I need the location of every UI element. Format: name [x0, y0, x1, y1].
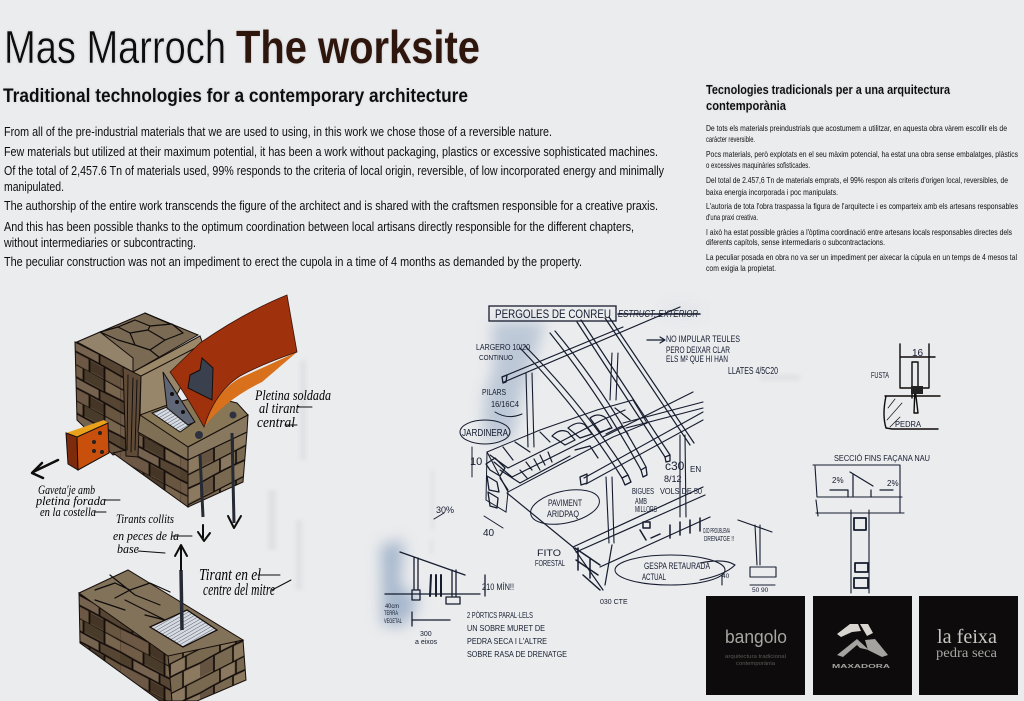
- english body text: manipulated.: [4, 179, 64, 194]
- english body text: [3, 124, 664, 269]
- catalan heading: contemporània: [706, 99, 787, 113]
- rod arrowheads: [198, 516, 241, 541]
- base right face: [168, 640, 246, 701]
- sketch: blue wash shading: [381, 307, 700, 626]
- catalan body text: [706, 123, 1018, 273]
- ellipse: gespa: [615, 555, 725, 585]
- dry stone wall: [486, 400, 647, 512]
- orange underside of plate: [204, 352, 297, 427]
- english body text: And this has been possible thanks to the optimum coordination between local artisans directly responsible for the different chapters,: [4, 219, 634, 234]
- steel base plate: [150, 610, 217, 647]
- sketch: small section: TERRA: [384, 611, 398, 617]
- note: no impuar teules: LLATES 4/5C20: [728, 366, 778, 377]
- labels on perspective: c30: [665, 459, 685, 473]
- ellipse: paviment: ARIDPAQ: [547, 509, 579, 519]
- inner light face: [140, 344, 203, 416]
- handwritten note: plate: central: [257, 415, 295, 431]
- catalan body text: o excessives maquinàries sofisticades.: [706, 160, 810, 170]
- sketch: small section: [384, 552, 567, 659]
- lower ground lines: [507, 487, 710, 590]
- sketch: small section: 300: [420, 631, 432, 638]
- handwritten note: centre rod: Tirant en el: [199, 565, 261, 584]
- dimension lines: [434, 412, 522, 528]
- arrow left: [32, 460, 58, 478]
- logo: la feixa: [919, 596, 1018, 695]
- labels on perspective: 8/12: [664, 474, 682, 484]
- subtitle: Traditional technologies for a contemporary architecture: [3, 86, 468, 107]
- sketch: small end detail: DRENATGE !!: [704, 536, 734, 543]
- sketch: small end detail: 50 90: [752, 587, 769, 594]
- vertical rod: [181, 570, 182, 630]
- english body text: From all of the pre-industrial materials that we are used to using, in this work we chose those of a reversible nature.: [4, 124, 552, 139]
- note: no impuar teules: NO IMPULAR TEULES: [666, 334, 740, 345]
- english body text: The authorship of the entire work transcends the figure of the architect and is shared with the craftsmen responsible for a creative praxis.: [4, 198, 658, 213]
- logo: mountain mark: MAXADORA: [832, 664, 890, 670]
- catalan body text: caràcter reversible.: [706, 134, 755, 144]
- right stone face: [188, 432, 247, 507]
- stone top: [77, 313, 198, 372]
- catalan heading: [706, 83, 951, 113]
- catalan body text: diferents capítols, sense intermediaris o subcontractacions.: [706, 237, 885, 247]
- red curved plate: [170, 295, 297, 427]
- logo: mountain mark: [813, 596, 912, 695]
- lower front stone face: [113, 432, 188, 507]
- catalan heading: Tecnologies tradicionals per a una arquitectura: [706, 83, 951, 97]
- note: no impuar teules: [666, 334, 778, 377]
- labels on perspective: AMB: [635, 497, 647, 506]
- sketch: small section: 40cm: [385, 604, 399, 610]
- ellipse: paviment: PAVIMENT: [548, 498, 582, 508]
- ledge sides: [138, 415, 188, 460]
- smudges of faint pencil: [268, 360, 800, 590]
- base plate: [152, 407, 193, 432]
- logo: bangolo: bangolo: [725, 627, 787, 647]
- sketch: small section: a eixos: [415, 639, 438, 646]
- logo: bangolo: arquitectura tradicional: [725, 654, 786, 660]
- handwritten note: plate: al tirant: [259, 401, 300, 417]
- labels on perspective: BIGUES: [632, 487, 654, 496]
- labels on perspective: [436, 342, 702, 606]
- handwritten note: anchor: [35, 482, 120, 519]
- sketch: pergola perspective: [434, 306, 778, 606]
- labels on perspective: MILLORS: [635, 505, 657, 514]
- labels on perspective: 030 CTE: [600, 599, 628, 606]
- handwritten note: centre rod: [199, 565, 291, 599]
- english body text: Of the total of 2,457.6 Tn of materials used, 99% responds to the criteria of local origin, reversible, of low incorporated energy and minimally: [4, 163, 664, 178]
- sketch: pillar foot detail: FUSTA: [871, 371, 889, 380]
- handwritten note: rods: base: [117, 541, 139, 556]
- note: porxos paral·lels: 2 PÒRTICS PARAL·LELS: [467, 610, 533, 620]
- title: The worksite: [236, 21, 480, 73]
- sketch: pillar foot detail: [871, 344, 940, 429]
- sketch: small end detail: [700, 520, 776, 594]
- tan top strip: [133, 336, 203, 378]
- logo: bangolo: [706, 596, 805, 695]
- english body text: Few materials but utilized at their maximum potential, it has been a work without packaging, plastics or excessive sophisticated machines.: [4, 144, 658, 159]
- labels on perspective: PILARS: [482, 388, 506, 397]
- pillars: [526, 353, 686, 543]
- catalan body text: baixa energia incorporada i poc manipulats.: [706, 187, 838, 197]
- sketch: small end detail: 40: [722, 573, 730, 580]
- stone cracks on top: [95, 575, 170, 620]
- sketch: pillar foot detail: 16: [912, 348, 924, 359]
- purlins: [502, 307, 703, 484]
- base left face: [79, 593, 172, 701]
- english body text: without intermediaries or subcontracting.: [3, 235, 196, 250]
- main beams: [520, 317, 694, 478]
- labels on perspective: VOLS DE 50: [660, 487, 702, 496]
- labels on perspective: 40: [483, 528, 495, 539]
- handwritten note: rods: Tirants collits: [116, 511, 174, 526]
- orange anchor box: [66, 420, 109, 470]
- arrow up: [175, 545, 187, 570]
- ellipse: gespa: ACTUAL: [642, 572, 666, 583]
- english body text: The peculiar construction was not an impediment to erect the cupola in a time of 4 months as demanded by the property.: [4, 254, 582, 269]
- ellipse: gespa: GESPA RETAURADA: [644, 561, 710, 572]
- logo: la feixa: la feixa: [937, 626, 997, 648]
- note: porxos paral·lels: SOBRE RASA DE DRENATGE: [467, 649, 567, 659]
- labels on perspective: FITO: [537, 548, 561, 558]
- labels on perspective: LARGERO 10/20: [476, 342, 530, 352]
- bolts: [195, 412, 236, 439]
- sketch: small end detail: OJO PROUBLEMA: [703, 528, 730, 535]
- sketch: small section: 210 MÍN!!: [482, 582, 514, 592]
- sketch: facade section: 2%: [832, 476, 844, 485]
- ledge top: [140, 395, 248, 447]
- sketch: stone pier with steel plate: [32, 295, 331, 599]
- arrow to note: [647, 337, 665, 343]
- title: [4, 21, 480, 73]
- carved column: [123, 367, 141, 457]
- beam end blocks: [502, 375, 670, 485]
- labels on perspective: FORESTAL: [535, 559, 565, 568]
- sketch: facade section: 2%: [887, 479, 899, 488]
- left stone face: [75, 342, 126, 455]
- plate cut-out: [188, 358, 213, 400]
- sketch: pillar foot detail: PEDRA: [895, 419, 921, 429]
- labels on perspective: EN: [690, 465, 701, 474]
- ellipse: jardinera: JARDINERA: [462, 428, 508, 439]
- sketch: facade section: [813, 453, 930, 593]
- handwritten note: anchor: en la costella: [40, 504, 96, 519]
- handwritten note: centre rod: centre del mitre: [203, 580, 275, 599]
- struck-through note: ESTRUCT. EXTERIOR: [618, 309, 698, 320]
- handwritten note: anchor: pletina forada: [35, 493, 106, 508]
- handwritten note: anchor: Gaveta'je amb: [38, 482, 95, 497]
- handwritten note: rods: [113, 511, 192, 556]
- labels on perspective: CONTINUO: [479, 355, 513, 362]
- ellipse: jardinera: [460, 420, 510, 444]
- handwritten note: plate: [254, 388, 331, 431]
- base top: [79, 570, 243, 656]
- tension rods: [200, 433, 234, 523]
- logo: bangolo: contemporània: [736, 661, 776, 667]
- catalan body text: com exigia la propietat.: [706, 263, 776, 273]
- note: no impuar teules: ELS M² QUE HI HAN: [666, 354, 728, 365]
- note: porxos paral·lels: PEDRA SECA I L'ALTRE: [467, 636, 547, 646]
- labels on perspective: 30%: [436, 505, 454, 515]
- sketch: small section: VEGETAL: [384, 619, 402, 625]
- catalan body text: d'una praxi creativa.: [706, 212, 758, 222]
- labels on perspective: 16/16C4: [491, 400, 520, 409]
- title: Mas Marroch: [4, 21, 226, 73]
- note: porxos paral·lels: [467, 610, 567, 659]
- sketch: facade section: SECCIÓ FINS FAÇANA NAU: [834, 453, 930, 463]
- pergola title box: PERGOLES DE CONREU: [495, 307, 611, 321]
- ellipse: paviment: [527, 484, 603, 530]
- note: porxos paral·lels: UN SOBRE MURET DE: [467, 623, 545, 633]
- handwritten note: rods: en peces de la: [113, 528, 179, 543]
- handwritten note: plate: Pletina soldada: [254, 388, 331, 404]
- gusset plate: [163, 372, 195, 425]
- labels on perspective: 10: [470, 456, 482, 468]
- note: no impuar teules: PERO DEIXAR CLAR: [666, 345, 730, 356]
- logo: la feixa: pedra seca: [936, 645, 997, 660]
- sketch: lower stone base with rod: [79, 545, 246, 701]
- retaining wall and rods detail: [575, 518, 700, 590]
